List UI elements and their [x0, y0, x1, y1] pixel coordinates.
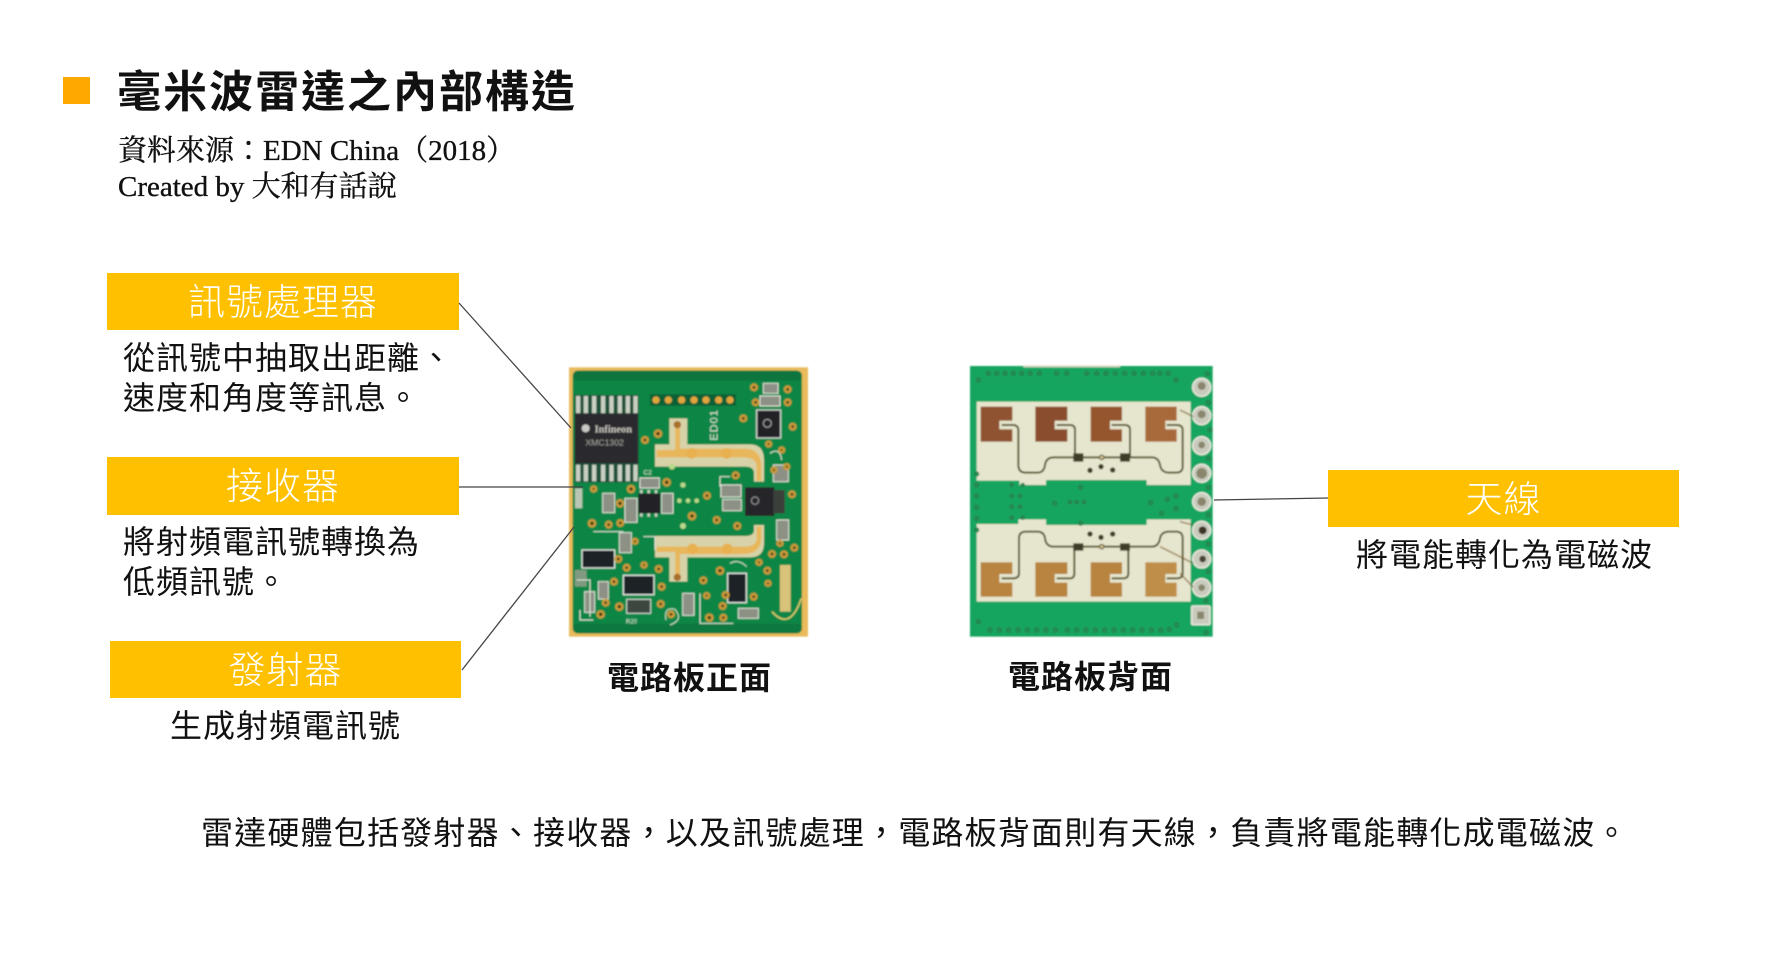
label: antenna: 天線 — [1466, 479, 1542, 520]
header pins — [650, 394, 736, 406]
main chip — [575, 395, 639, 482]
feed notches — [999, 421, 1179, 583]
label: signal processor: 訊號處理器 — [188, 282, 378, 323]
circuit board front photo: XMC1302 — [585, 437, 624, 447]
label: signal processor — [107, 273, 459, 330]
source credit: Created by 大和有話說 — [118, 171, 397, 203]
description: transmitter: 生成射頻電訊號 — [170, 708, 401, 744]
top panel — [977, 402, 1191, 485]
circuit board front photo: C2 — [643, 470, 652, 477]
circuit board back photo — [968, 364, 1214, 638]
description: signal processor: 從訊號中抽取出距離、 — [123, 340, 453, 376]
bottom panel — [977, 519, 1191, 602]
top antenna feed — [655, 418, 764, 482]
caption: board front: 電路板正面 — [607, 660, 772, 696]
traces — [1002, 425, 1183, 578]
summary text: 雷達硬體包括發射器、接收器，以及訊號處理，電路板背面則有天線，負責將電能轉化成電磁波。 — [201, 815, 1629, 851]
label: transmitter: 發射器 — [228, 650, 342, 691]
bottom antenna feed — [655, 525, 764, 582]
title: 毫米波雷達之內部構造 — [117, 68, 577, 117]
description: receiver — [123, 524, 420, 600]
circuit board front photo: Infineon — [595, 424, 632, 435]
circuit board front photo: R20 — [626, 619, 638, 625]
patches top — [981, 407, 1012, 442]
description: receiver: 將射頻電訊號轉換為 — [123, 524, 420, 560]
vias — [589, 385, 797, 621]
circuit board front photo: ED01 — [709, 409, 721, 441]
small vias — [975, 371, 1212, 635]
description: receiver: 低頻訊號。 — [123, 564, 288, 600]
label: transmitter — [110, 641, 461, 698]
circuit board front photo — [568, 366, 809, 638]
title marker square — [63, 77, 90, 104]
description: signal processor — [123, 340, 453, 416]
chips — [745, 487, 774, 516]
passive parts — [585, 383, 789, 618]
connector pins — [1192, 378, 1211, 625]
caption: board back: 電路板背面 — [1008, 659, 1173, 695]
label: receiver — [107, 457, 459, 515]
gold pad — [780, 565, 791, 612]
label: antenna — [1328, 470, 1679, 527]
label: receiver: 接收器 — [226, 466, 340, 507]
description: signal processor: 速度和角度等訊息。 — [123, 380, 420, 416]
source credit — [118, 135, 515, 203]
patches bottom — [981, 562, 1012, 597]
source credit: 資料來源：EDN China（2018） — [118, 135, 515, 167]
description: antenna: 將電能轉化為電磁波 — [1356, 537, 1653, 573]
